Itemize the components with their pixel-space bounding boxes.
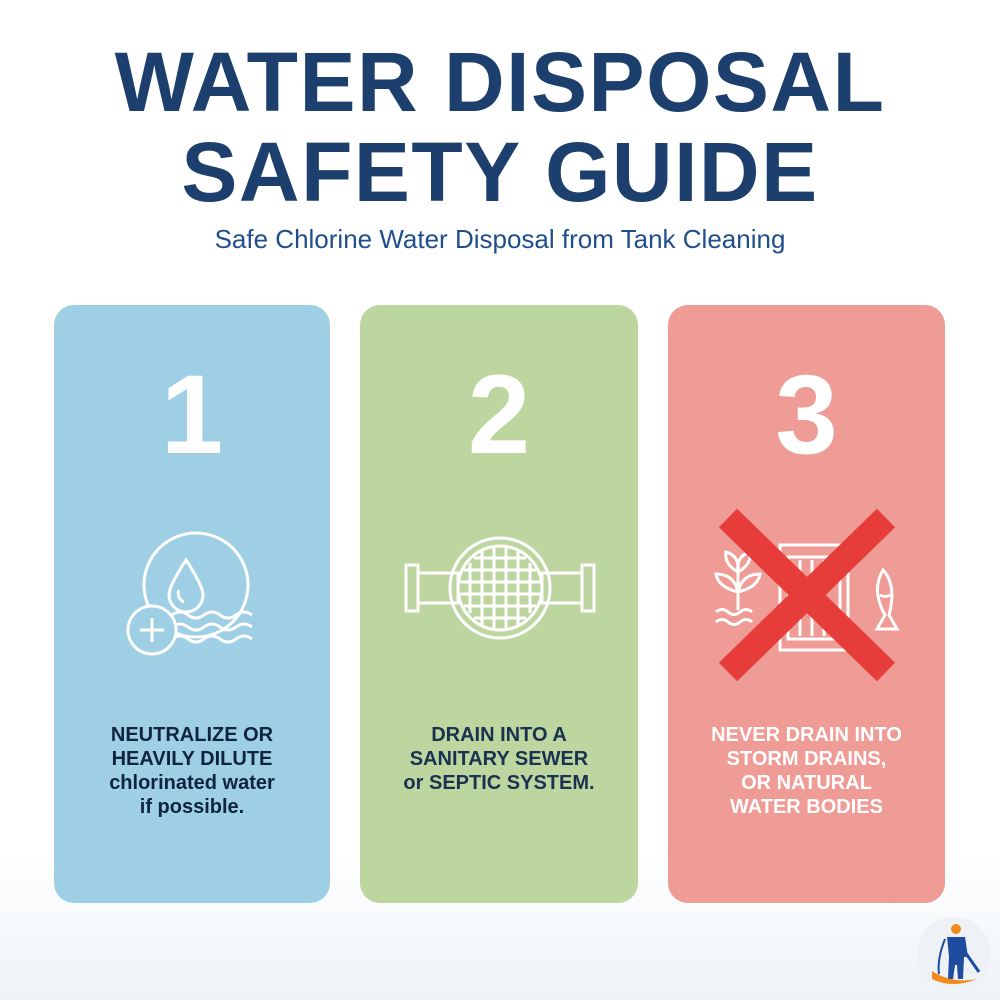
text: STORM DRAINS, <box>727 748 886 770</box>
text: SANITARY SEWER <box>410 748 588 770</box>
text <box>109 724 275 818</box>
number 3: 3 <box>775 352 838 477</box>
logo badge <box>917 917 991 991</box>
text: WATER BODIES <box>730 796 883 818</box>
title line 2: SAFETY GUIDE <box>181 125 819 219</box>
panel: step 2 <box>360 305 638 903</box>
icon: water drop with plus <box>126 532 253 656</box>
text: HEAVILY DILUTE <box>112 748 272 770</box>
icon: pipe with drain grate <box>404 536 596 640</box>
icon: crossed-out storm drain, plant and fish <box>714 508 900 682</box>
number 2: 2 <box>468 352 530 477</box>
text: OR NATURAL <box>741 772 872 794</box>
number 1: 1 <box>161 352 223 477</box>
text: or SEPTIC SYSTEM. <box>403 772 595 794</box>
text: NEUTRALIZE OR <box>111 724 273 746</box>
text: NEVER DRAIN INTO <box>711 724 902 746</box>
text: chlorinated water <box>109 772 275 794</box>
panel: step 1 <box>54 305 330 903</box>
title: WATER DISPOSAL <box>115 35 885 129</box>
text <box>403 724 595 794</box>
text <box>711 724 902 818</box>
text: DRAIN INTO A <box>431 724 567 746</box>
subtitle: Safe Chlorine Water Disposal from Tank Cleaning <box>215 224 785 254</box>
text: if possible. <box>140 796 244 818</box>
panel: step 3 <box>668 305 945 903</box>
